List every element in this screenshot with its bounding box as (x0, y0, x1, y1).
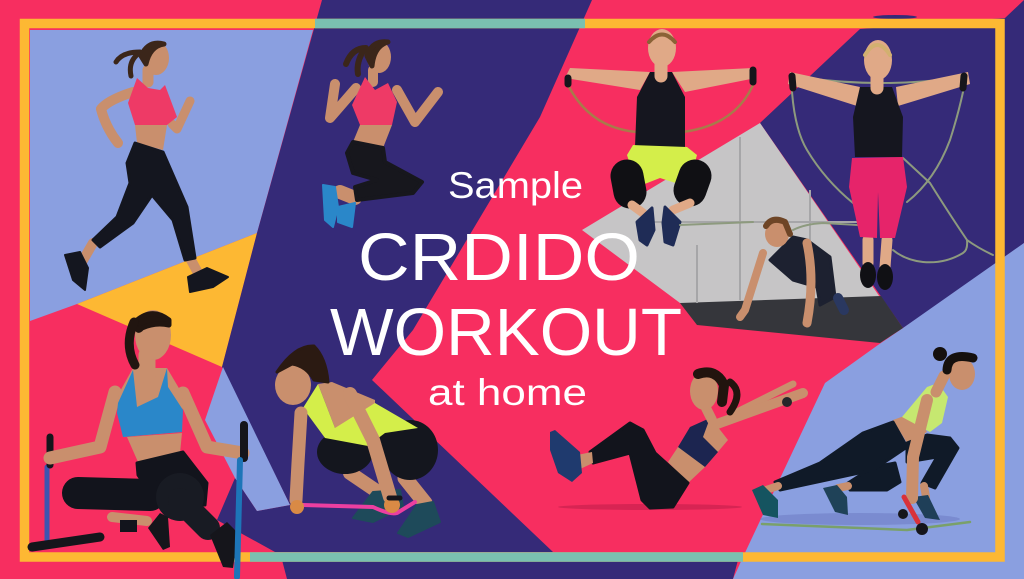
figure: side lunge (752, 347, 975, 535)
title (330, 165, 682, 413)
title line: WORKOUT: WORKOUT (330, 295, 682, 370)
title line: Sample: Sample (448, 165, 583, 206)
figure: resistance band squat (565, 29, 756, 245)
title line: CRDIDO: CRDIDO (358, 220, 640, 295)
figure: plank on gray panel (740, 220, 844, 323)
title line: at home: at home (428, 372, 587, 413)
figure: blue top squat with poles (32, 310, 244, 577)
figure: jumper (323, 41, 438, 227)
figure: runner (65, 41, 228, 292)
figure: sit-up (550, 372, 803, 508)
figure: neon top crouch with band (275, 346, 440, 537)
figure: resistance band jump (680, 40, 993, 290)
